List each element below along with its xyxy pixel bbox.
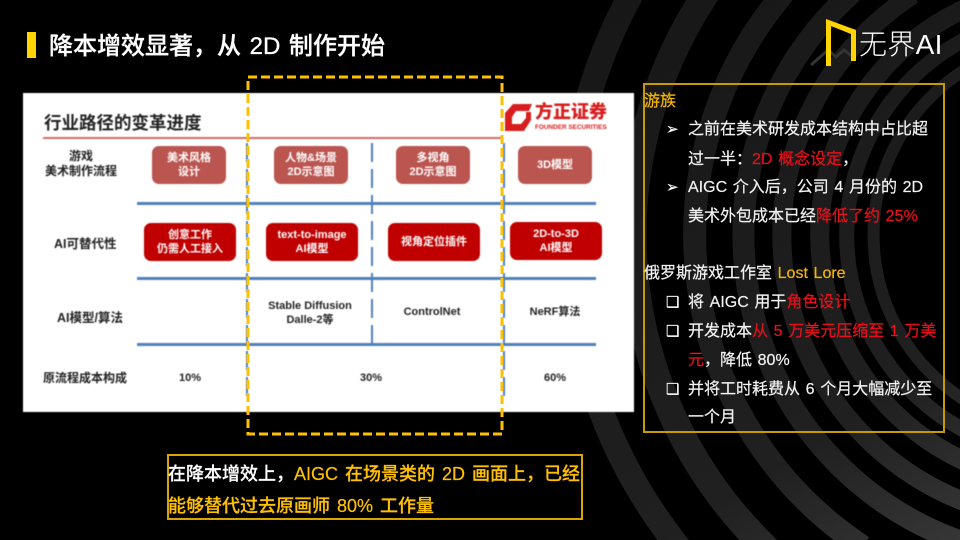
AI: text to image xyxy=(266,223,358,261)
accent bar xyxy=(27,32,36,58)
model: stable diffusion: Stable Diffusion xyxy=(268,300,352,312)
row label: AI models: AI模型/算法 xyxy=(57,311,123,325)
AI: 2D to 3D xyxy=(510,222,602,260)
text: development cost continued: 元，降低 80% xyxy=(688,352,790,369)
callout line 2: 能够替代过去原画师 80% 工作量 xyxy=(168,496,434,516)
grid lines xyxy=(136,142,597,397)
heading rule xyxy=(43,137,503,139)
row label: art workflow: 游戏 xyxy=(69,149,93,163)
bullet arrow 1: ➢ xyxy=(666,120,679,138)
step: multi view: 多视角 xyxy=(416,152,450,164)
founder name: 方正证券 xyxy=(535,102,607,122)
bullet box 2: ❑ xyxy=(666,322,679,340)
row label: art workflow xyxy=(44,149,118,178)
founder english: FOUNDER SECURITIES xyxy=(535,124,607,131)
row label: art workflow: 美术制作流程 xyxy=(45,164,117,178)
model: stable diffusion: Dalle-2等 xyxy=(286,314,334,326)
text: cost structure continued: 过一半：2D 概念设定， xyxy=(688,151,858,168)
step: art style: 设计 xyxy=(178,166,200,178)
bullet arrow 2: ➢ xyxy=(666,178,679,196)
AI: text to image: text-to-image xyxy=(277,229,347,241)
panel heading: 行业路径的变革进度 xyxy=(44,113,202,133)
text: development cost: 开发成本从 5 万美元压缩至 1 万美 xyxy=(688,323,936,340)
text: work hours continued: 一个月 xyxy=(688,409,736,426)
logo wordmark: 无界AI xyxy=(859,29,943,60)
step: 3D model: 3D模型 xyxy=(537,159,573,171)
value: 60%: 60% xyxy=(544,372,566,384)
model: controlnet: ControlNet xyxy=(404,306,460,318)
model: stable diffusion xyxy=(268,300,352,326)
AI: 2D to 3D: 2D-to-3D xyxy=(533,228,579,240)
text: AIGC intervention: AIGC 介入后，公司 4 月份的 2D xyxy=(688,179,923,196)
model: NeRF: NeRF算法 xyxy=(530,306,580,318)
text: character design: 将 AIGC 用于角色设计 xyxy=(688,294,850,311)
icon: logo mark xyxy=(810,19,856,66)
icon: founder mark xyxy=(504,103,532,132)
callout: conclusion xyxy=(167,454,583,520)
AI: view plugin xyxy=(388,223,480,261)
value: 10%: 10% xyxy=(179,372,201,384)
text: work hours: 并将工时耗费从 6 个月大幅减少至 xyxy=(688,381,932,398)
step: character and scene: 2D示意图 xyxy=(287,166,335,178)
text: cost structure: 之前在美术研发成本结构中占比超 xyxy=(688,121,928,138)
title: 降本增效显著，从 2D 制作开始 xyxy=(49,33,385,60)
step: multi view: 2D示意图 xyxy=(409,166,457,178)
row label: AI replaceability: AI可替代性 xyxy=(54,237,117,251)
step: character and scene xyxy=(274,146,348,184)
step: art style: 美术风格 xyxy=(167,152,211,164)
AI: creative work xyxy=(144,223,236,261)
case heading: Lost Lore: 俄罗斯游戏工作室 Lost Lore xyxy=(644,265,846,282)
step: character and scene: 人物&场景 xyxy=(285,152,337,164)
step: multi view xyxy=(396,146,470,184)
row label: cost share: 原流程成本构成 xyxy=(43,371,127,385)
panel: case studies xyxy=(643,83,945,433)
callout line 1: 在降本增效上，AIGC 在场景类的 2D 画面上，已经 xyxy=(168,464,580,484)
AI: creative work: 仍需人工接入 xyxy=(157,243,223,255)
step: 3D model xyxy=(518,146,592,184)
bullet box 1: ❑ xyxy=(666,293,679,311)
AI: creative work: 创意工作 xyxy=(168,229,212,241)
logo: Founder Securities xyxy=(504,101,608,132)
logo xyxy=(810,19,943,66)
AI: 2D to 3D: AI模型 xyxy=(540,242,572,254)
dashed highlight frame xyxy=(246,76,504,436)
AI: view plugin: 视角定位插件 xyxy=(401,236,467,248)
text: cost reduction: 美术外包成本已经降低了约 25% xyxy=(688,208,918,225)
panel: industry path image xyxy=(23,93,634,412)
AI: text to image: AI模型 xyxy=(296,243,328,255)
value: 30%: 30% xyxy=(360,372,382,384)
bullet box 3: ❑ xyxy=(666,380,679,398)
step: art style xyxy=(152,146,226,184)
case heading: Youzu: 游族 xyxy=(644,93,676,110)
